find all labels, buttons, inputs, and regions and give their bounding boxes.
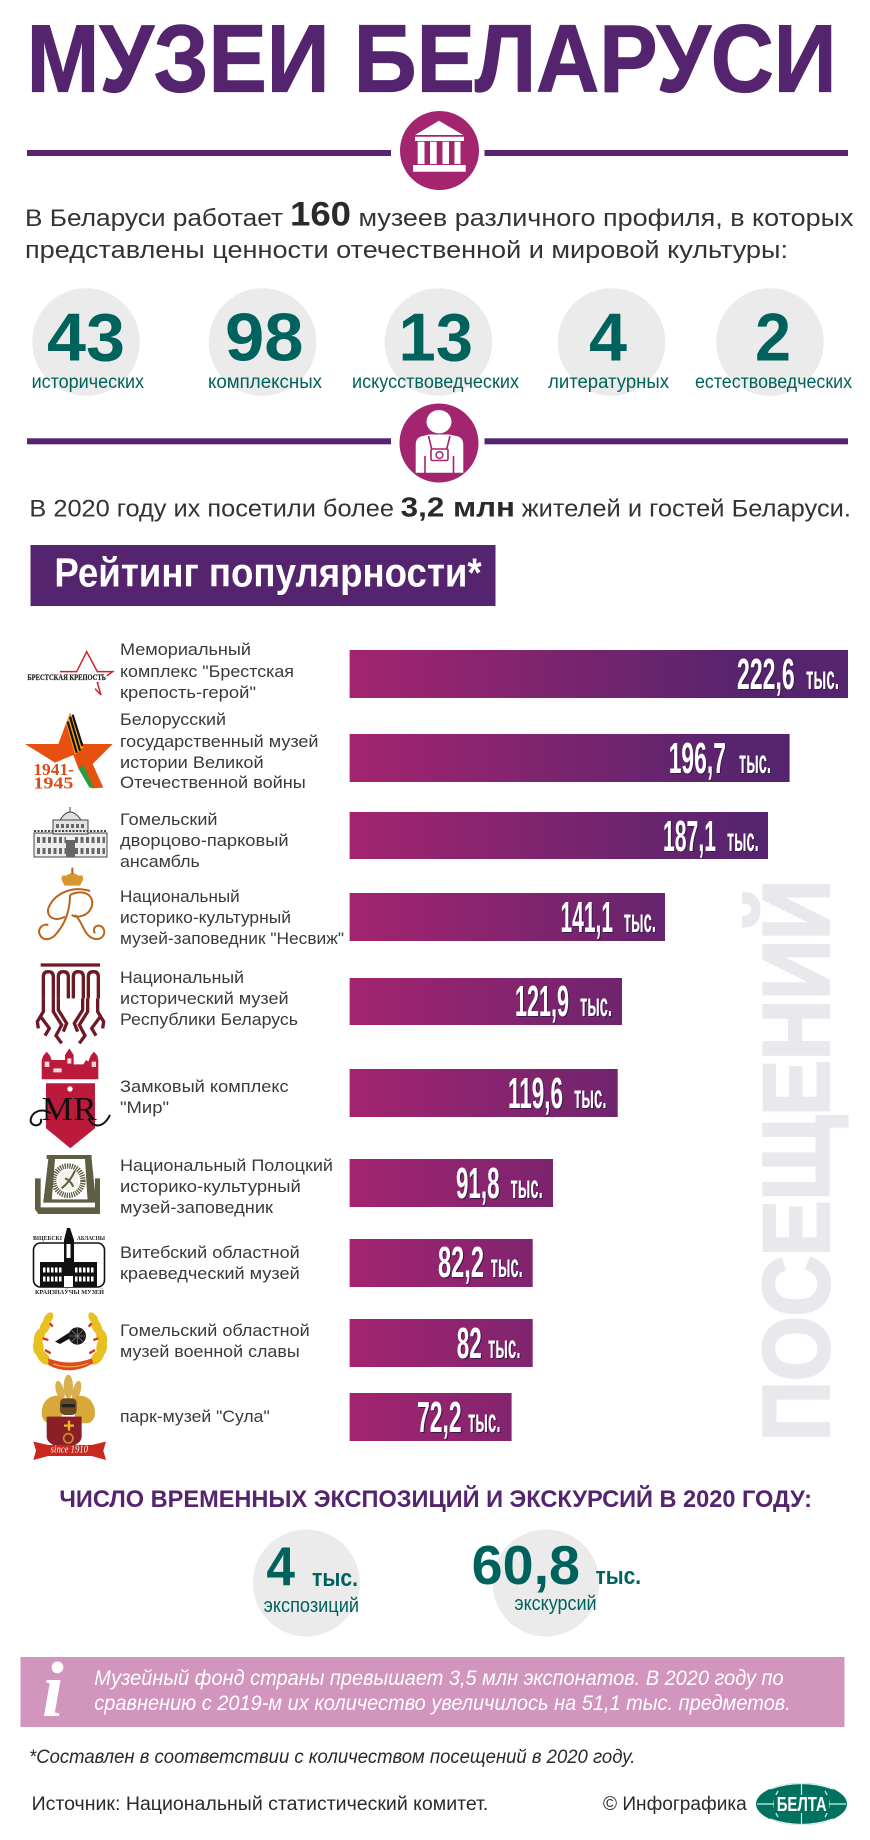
- intro text: представлены ценности отечественной и мировой культуры:: [25, 237, 788, 264]
- row 10: Sula park: [33, 1375, 512, 1460]
- bar: [350, 1159, 553, 1208]
- bar: [350, 893, 665, 942]
- source: Источник: Национальный статистический комитет.: [32, 1794, 488, 1815]
- stat: 4 thousand expositions: экспозиций: [264, 1595, 359, 1617]
- label: Национальный Полоцкий: [120, 1156, 333, 1175]
- stat: 4 literary: 4: [589, 300, 627, 376]
- logo: Brest Fortress: БРЕСТСКАЯ КРЕПОСТЬ: [27, 673, 106, 682]
- stat: 43 historical: исторических: [32, 372, 144, 393]
- bar: 196,7: [669, 734, 726, 783]
- logo: Mir Castle: [31, 1048, 110, 1148]
- logo: Polotsk reserve: [35, 1155, 100, 1214]
- icon: visitor with camera: [400, 404, 478, 482]
- row 6: Mir Castle: [31, 1048, 618, 1148]
- label: дворцово-парковый: [120, 831, 289, 850]
- stat: 60,8 thousand tours: тыс.: [596, 1563, 641, 1590]
- watermark: visits: ПОСЕЩЕНИЙ: [742, 880, 848, 1441]
- label: крепость-герой": [120, 683, 256, 702]
- icon: info letter: i: [42, 1646, 64, 1733]
- stat: 4 literary: [548, 288, 669, 396]
- row 8: Vitebsk: [32, 1228, 533, 1296]
- stat: 98 complex: [208, 288, 322, 396]
- visitors text: В 2020 году их посетили более: [29, 495, 394, 522]
- stat: 60,8 thousand tours: [472, 1530, 641, 1636]
- stat: 43 historical: 43: [47, 300, 125, 376]
- intro text: В Беларуси работает: [25, 205, 283, 232]
- intro text: [25, 196, 854, 264]
- logo: BELTA: [756, 1783, 847, 1825]
- label: музей-заповедник: [120, 1198, 274, 1217]
- bar: [350, 1393, 512, 1442]
- stat: 98 complex: 98: [225, 300, 304, 376]
- bar: тыс.: [491, 1247, 523, 1284]
- label: Белорусский: [120, 710, 226, 729]
- label: Гомельский: [120, 810, 218, 829]
- label: государственный музей: [120, 732, 318, 751]
- bar: тыс.: [468, 1402, 500, 1439]
- row 3: Gomel palace: [34, 807, 768, 871]
- bar: 222,6: [737, 650, 795, 699]
- bar: тыс.: [510, 1168, 543, 1205]
- label: [120, 710, 318, 792]
- logo: Vitebsk museum: ВІЦЕБСКІ: [33, 1235, 62, 1242]
- bar: 121,9: [515, 977, 569, 1026]
- label: Национальный: [120, 968, 244, 987]
- info text: сравнению с 2019-м их количество увеличилось на 51,1 тыс. предметов.: [94, 1692, 791, 1715]
- label: Мемориальный: [120, 640, 251, 659]
- label: Замковый комплекс: [120, 1077, 289, 1096]
- label: [120, 640, 294, 702]
- bar: тыс.: [574, 1078, 606, 1115]
- bar: 187,1: [663, 812, 716, 861]
- label: [120, 1243, 300, 1283]
- label: историко-культурный: [120, 1177, 301, 1196]
- stat: 60,8 thousand tours: экскурсий: [514, 1593, 597, 1615]
- label: Отечественной войны: [120, 773, 306, 792]
- credit: © Инфографика: [603, 1794, 747, 1815]
- logo: Nesvizh crown and R: [39, 868, 104, 939]
- logo: Vitebsk museum: [32, 1228, 106, 1296]
- label: музей военной славы: [120, 1342, 300, 1361]
- bar: 141,1: [560, 893, 613, 942]
- logo: National History Museum: [37, 965, 104, 1043]
- stat: 98 complex: комплексных: [208, 372, 322, 393]
- label: "Мир": [120, 1098, 169, 1117]
- logo: Brest Fortress: [27, 652, 113, 695]
- stat: 2 natural science: естествоведческих: [695, 372, 852, 393]
- label: краеведческий музей: [120, 1264, 300, 1283]
- divider with visitor icon: [27, 404, 848, 482]
- icon: museum building: [400, 111, 479, 190]
- bar: [350, 1238, 533, 1287]
- logo: Gomel palace: [34, 807, 107, 857]
- logo: wreath and cannon: [32, 1311, 109, 1370]
- label: Витебский областной: [120, 1243, 300, 1262]
- bar: [350, 1069, 618, 1118]
- logo: war museum star: 1945: [33, 773, 73, 792]
- info text: Музейный фонд страны превышает 3,5 млн экспонатов. В 2020 году по: [94, 1667, 784, 1690]
- bar: тыс.: [488, 1328, 520, 1365]
- logo: Sula coat of arms: since 1910: [51, 1445, 88, 1456]
- bar: [350, 650, 848, 699]
- label: парк-музей "Сула": [120, 1407, 270, 1426]
- row 1: Brest Fortress: [27, 640, 848, 702]
- row 9: Gomel military glory: [32, 1311, 533, 1370]
- visitors text: жителей и гостей Беларуси.: [522, 495, 851, 522]
- label: комплекс "Брестская: [120, 662, 294, 681]
- stat: 4 literary: литературных: [548, 372, 669, 393]
- label: Республики Беларусь: [120, 1010, 298, 1029]
- stat: 43 historical: [32, 288, 144, 396]
- row 4: Nesvizh: [39, 868, 665, 948]
- stat: 2 natural science: 2: [755, 300, 791, 376]
- label: [120, 1077, 289, 1117]
- bar: 91,8: [456, 1159, 500, 1208]
- label: [120, 968, 298, 1029]
- stat: 13 art history: 13: [398, 300, 473, 376]
- bar: тыс.: [580, 986, 612, 1023]
- stat: 13 art history: искусствоведческих: [352, 372, 519, 393]
- logo: Vitebsk museum: АБЛАСНЫ: [77, 1235, 105, 1242]
- logo: war museum star: 1941-: [33, 760, 74, 779]
- label: Гомельский областной: [120, 1321, 310, 1340]
- bar: тыс.: [727, 821, 759, 858]
- stat: 4 thousand expositions: 4: [266, 1535, 295, 1597]
- info text: [94, 1667, 791, 1715]
- label: [120, 1321, 310, 1361]
- logo: Sula coat of arms: [33, 1375, 106, 1460]
- stat: 4 thousand expositions: [253, 1530, 360, 1636]
- label: [120, 1156, 333, 1217]
- label: исторический музей: [120, 989, 289, 1008]
- bar: 72,2: [417, 1393, 462, 1442]
- bar: [350, 812, 768, 861]
- label: истории Великой: [120, 753, 264, 772]
- stat: 13 art history: [352, 288, 519, 396]
- visitors text: [29, 491, 851, 522]
- bar: 119,6: [508, 1069, 563, 1118]
- banner: popularity rating: Рейтинг популярности*: [54, 549, 482, 595]
- label: [120, 887, 344, 948]
- label: историко-культурный: [120, 908, 291, 927]
- info box: [20, 1646, 844, 1733]
- row 2: Great Patriotic War museum: [25, 710, 790, 792]
- divider with museum icon: [27, 111, 848, 190]
- stat: 2 natural science: [695, 288, 852, 396]
- intro text: музеев различного профиля, в которых: [358, 205, 854, 232]
- label: Национальный: [120, 887, 240, 906]
- label: ансамбль: [120, 852, 200, 871]
- label: [120, 810, 289, 871]
- bar: [350, 734, 790, 783]
- logo: BELTA: БЕЛТА: [777, 1794, 827, 1816]
- bar: тыс.: [624, 902, 656, 939]
- banner: popularity rating: [30, 545, 496, 606]
- row 7: Polotsk: [35, 1155, 553, 1217]
- bar: 82,2: [438, 1238, 484, 1287]
- label: музей-заповедник "Несвиж": [120, 929, 344, 948]
- logo: Vitebsk museum: КРАЯЗНАЎЧЫ МУЗЕЙ: [35, 1288, 104, 1296]
- footnote: *Составлен в соответствии с количеством посещений в 2020 году.: [29, 1747, 635, 1768]
- row 5: National History Museum: [37, 965, 622, 1043]
- bar: [350, 1319, 533, 1368]
- heading: temporary expositions and tours: ЧИСЛО ВРЕМЕННЫХ ЭКСПОЗИЦИЙ И ЭКСКУРСИЙ В 2020 ГОДУ:: [59, 1485, 812, 1513]
- stat: 60,8 thousand tours: 60,8: [472, 1534, 580, 1596]
- bar: тыс.: [739, 743, 771, 780]
- visitors text: 3,2 млн: [401, 491, 515, 522]
- intro text: 160: [290, 196, 351, 234]
- bar: 82: [457, 1319, 482, 1368]
- logo: Mir Castle: MR: [42, 1091, 97, 1128]
- logo: war museum star: [25, 713, 113, 792]
- stat: 4 thousand expositions: тыс.: [312, 1565, 358, 1592]
- bar: [350, 977, 622, 1026]
